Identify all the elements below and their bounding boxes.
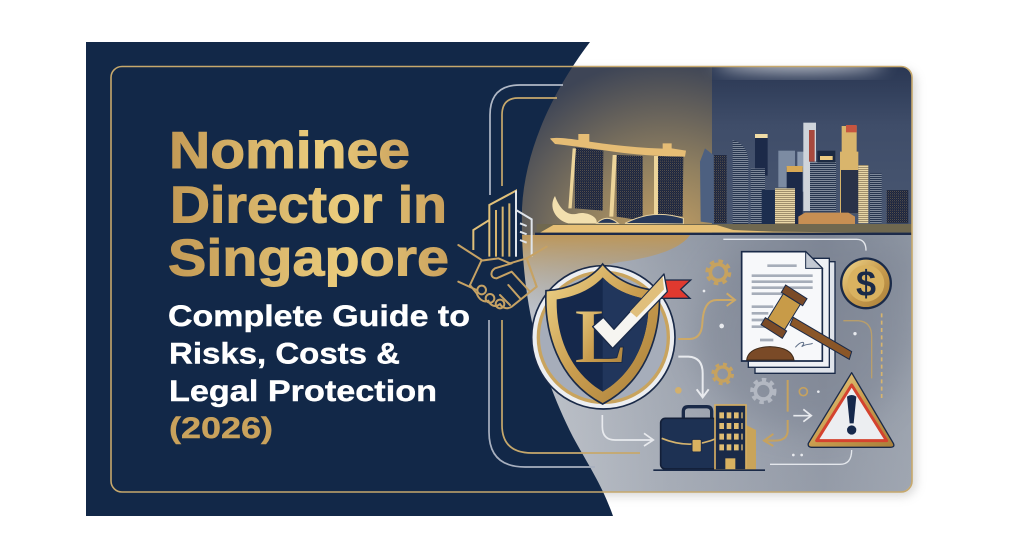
decorative circuit lines on navy [489,85,640,467]
signature [795,342,813,347]
waterline [535,233,912,235]
briefcase body [661,418,717,469]
gavel handle [790,317,852,359]
subtitle: Legal Protection [169,375,437,408]
front page [742,252,822,361]
building side [746,425,756,470]
icon: office building [473,191,532,257]
title: Singapore [168,230,449,288]
title: Director in [170,176,447,234]
check mark gold tint [630,277,664,317]
subtitle [168,300,470,408]
title: Nominee [169,122,410,180]
small ring [799,388,807,396]
infographic banner [86,42,920,516]
icon: briefcase and building [653,405,765,471]
lower grey background [524,235,912,492]
sky top glow [710,67,890,80]
gavel cap top [781,285,807,306]
arrow shield to briefcase [678,357,709,397]
check mark [593,274,667,348]
navy left panel [86,42,613,516]
right tower group [798,123,908,228]
waterfront lights [537,224,912,233]
dashed line right [879,313,884,400]
lower background light wash [558,326,911,492]
arrow from warning to building [764,380,788,446]
waterfront gold glow [540,225,873,233]
page fold [806,252,822,268]
Marina Bay Sands tower three [657,156,683,217]
gear top [708,262,729,283]
icon: dollar coin [840,257,892,309]
gold glow below skyline [522,235,690,300]
year: (2026) [169,412,273,445]
building door [725,458,735,470]
title [168,122,449,288]
icon: legal shield medallion [532,264,691,409]
line bottom right [770,450,852,464]
subtitle: Complete Guide to [168,300,470,333]
icon: legal document with gavel [742,252,852,373]
ribbon [662,280,691,298]
night sky left [522,67,712,235]
shield highlight half [603,277,649,392]
gavel head [768,294,800,330]
medallion gold ring [538,272,668,402]
icon: warning triangle [808,373,894,447]
skyline [535,123,912,235]
gavel cap bottom [761,318,787,338]
medallion disc [532,266,675,409]
gavel block [747,347,794,360]
middle page [748,258,829,367]
gears and connector arrows [602,239,882,464]
building windows [719,415,743,447]
art science lotus [552,196,597,223]
central tower group [700,134,807,227]
building body [715,405,746,470]
briefcase handle [683,407,712,420]
subtitle: Risks, Costs & [169,338,400,370]
Marina Bay Sands sky deck [550,134,686,157]
dome [597,214,683,224]
gold frame [111,66,912,492]
arrow shield to document [678,293,735,339]
briefcase gold trim [662,438,717,444]
panel shadow [480,70,916,496]
small arrow [793,409,811,422]
soft dark backdrop behind icons [696,261,911,424]
panel: illustrated scene [522,67,912,492]
shield letter: L [574,293,627,380]
small dots [675,290,857,456]
Marina Bay Sands tower one [575,147,603,211]
arrow lower left [602,415,653,446]
icon: handshake [458,245,547,308]
back pages [755,262,835,373]
Marina Bay Sands legs [568,148,658,217]
gear grey [752,380,774,402]
ground line [653,469,765,471]
gear middle [713,365,732,383]
briefcase clasp [692,439,701,452]
shield gold [546,264,660,404]
page text lines [752,266,813,340]
line right curve [843,321,872,378]
icon: dollar coin: $ [856,263,876,304]
shield navy centre [557,277,649,392]
night sky right [712,66,912,236]
Marina Bay Sands tower two [617,155,643,221]
line top right [723,239,866,251]
